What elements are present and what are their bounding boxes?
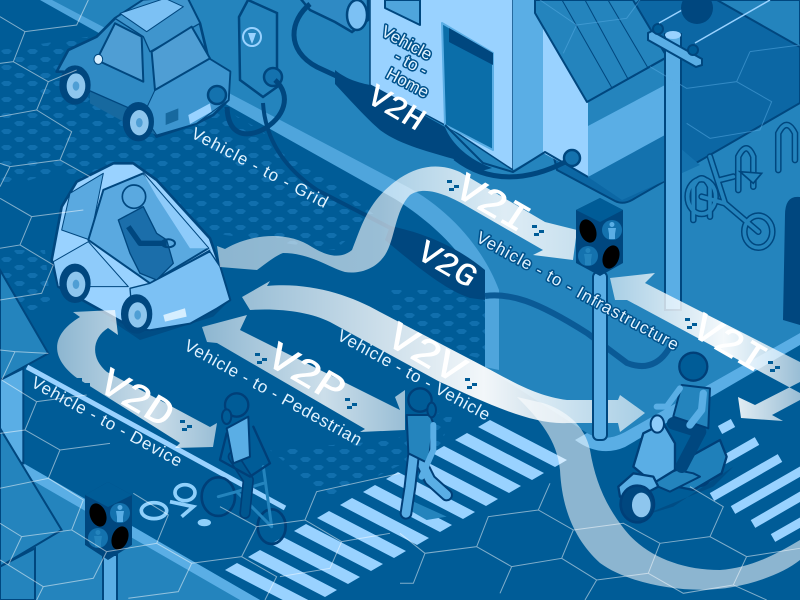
charging station <box>239 0 282 97</box>
second roof top right <box>717 0 800 47</box>
curb along right road <box>575 333 800 451</box>
front wheel <box>621 486 654 522</box>
door lintel shadow <box>449 28 493 65</box>
wing mirror <box>94 54 103 64</box>
rider leg <box>233 457 248 513</box>
car parked at charger top <box>300 0 368 32</box>
car cabin <box>88 173 208 283</box>
bike rack and parked bicycle <box>688 125 795 248</box>
scooter footboard <box>647 470 700 492</box>
label: vehicle to pedestrian: Vehicle - to - Pedestrian <box>181 336 365 449</box>
side wall shadow <box>588 60 665 126</box>
roof upper left building <box>0 270 48 380</box>
arm <box>422 425 433 477</box>
headlamp <box>651 415 664 433</box>
front leg <box>406 457 413 513</box>
rider far arm <box>657 388 680 407</box>
back wheel <box>202 477 235 516</box>
arrow: V2I right side <box>610 273 800 421</box>
sidewalk upper right <box>47 0 800 438</box>
scooter seat cowling <box>677 440 727 490</box>
car charge cable and plug <box>208 80 284 134</box>
cyclist <box>202 393 286 544</box>
label: vehicle to home on wall <box>378 22 435 102</box>
crosswalk main <box>225 420 567 600</box>
curb along upper road <box>40 0 499 370</box>
car upper side <box>62 173 103 240</box>
driver head <box>122 185 146 208</box>
steering wheel <box>162 239 175 247</box>
car rear <box>143 58 230 135</box>
crosswalk right <box>712 423 800 538</box>
label: vehicle to home on wall: Vehicle <box>378 22 435 64</box>
car roof surround <box>115 0 200 52</box>
windscreen highlight <box>143 173 208 248</box>
cable: vehicle to grid <box>263 103 673 366</box>
housing <box>85 482 132 560</box>
charger icon <box>243 28 261 46</box>
power wires <box>659 0 770 43</box>
house roof <box>535 0 667 102</box>
number plate <box>188 103 212 124</box>
stop signal <box>88 528 108 548</box>
housing top <box>85 482 132 507</box>
car shell <box>52 163 230 330</box>
rider leg <box>673 423 700 467</box>
pixel label V2I: V2I <box>445 167 537 244</box>
rider torso <box>673 385 710 428</box>
front wheel <box>258 509 286 544</box>
rider arm <box>690 393 703 425</box>
road behind house <box>540 0 800 203</box>
house <box>370 0 667 177</box>
back leg <box>418 457 447 495</box>
power pole <box>648 24 702 310</box>
ponytail <box>427 403 436 417</box>
pole <box>103 555 117 600</box>
housing top <box>576 198 623 222</box>
scooter with rider <box>618 353 733 522</box>
rear wheel <box>690 467 710 486</box>
pixel label V2H: V2H <box>359 79 432 139</box>
v2g cable blob <box>385 226 485 300</box>
car door side <box>53 242 128 287</box>
driver arm <box>128 227 167 243</box>
label: vehicle to grid: Vehicle - to - Grid <box>188 124 331 212</box>
car sill <box>90 92 157 135</box>
car shadow <box>110 300 230 340</box>
torso <box>407 415 433 463</box>
left buildings <box>0 270 62 600</box>
pixel label V2P: V2P <box>257 336 353 415</box>
lamp off <box>86 501 110 529</box>
side window <box>97 23 143 82</box>
walk signal <box>110 503 130 523</box>
rider ponytail <box>222 409 231 424</box>
house corner <box>543 0 600 177</box>
v2g ribbon lower body <box>517 397 800 590</box>
label: vehicle to home on wall: Home <box>383 64 432 102</box>
traffic light right <box>576 198 623 440</box>
left road lower sidewalk <box>0 450 260 600</box>
arrow: V2V <box>242 281 645 432</box>
leg shield <box>633 423 675 483</box>
wheel left <box>61 265 89 302</box>
rider top <box>227 417 250 463</box>
wall upper left building <box>0 368 23 463</box>
window <box>385 0 420 25</box>
door <box>442 23 493 150</box>
pixel label V2D: V2D <box>89 362 181 439</box>
lamp off <box>108 524 132 552</box>
charger socket <box>264 68 282 86</box>
car body <box>57 0 230 137</box>
headlamp <box>163 308 187 322</box>
rider head <box>225 393 248 417</box>
housing <box>576 198 623 276</box>
autonomous car with driver <box>52 163 230 340</box>
arrow: V2P <box>202 315 405 432</box>
house shadow on road <box>588 135 700 200</box>
house side wall <box>588 60 665 177</box>
house base outline <box>445 125 588 177</box>
helmet <box>679 353 707 381</box>
car roof <box>120 0 183 32</box>
wall lower left building <box>0 548 35 600</box>
pixel label V2V: V2V <box>377 316 473 395</box>
label: vehicle to vehicle: Vehicle - to - Vehicle <box>334 326 493 424</box>
v2h cable blob <box>335 70 492 172</box>
pixel label V2I right: V2I <box>682 307 774 384</box>
stop signal <box>578 246 598 266</box>
car wheel rear <box>61 67 89 103</box>
arrow: V2D <box>57 310 217 448</box>
lower windscreen <box>150 250 210 283</box>
red lamp off <box>576 217 600 245</box>
pixel dot clusters on arrows <box>77 180 780 431</box>
cable: vehicle to home <box>294 4 580 177</box>
car wheel front <box>124 103 153 140</box>
bicycle frame <box>218 467 272 527</box>
transformer <box>681 0 713 24</box>
bike lane line <box>27 367 285 508</box>
label: vehicle to device: Vehicle - to - Device <box>28 373 185 471</box>
plug socket <box>564 150 580 166</box>
pole <box>593 272 607 440</box>
driver torso <box>118 207 173 280</box>
house pillar <box>513 0 543 170</box>
wheel right <box>122 296 151 332</box>
roof lower left building <box>0 428 62 567</box>
pixel label V2G: V2G <box>409 235 484 296</box>
pedestrian <box>403 388 447 520</box>
walk signal <box>602 220 622 240</box>
cable toward traffic light <box>485 295 673 366</box>
pedestrian shadow <box>403 500 447 520</box>
rear window <box>152 27 210 90</box>
rider arms <box>220 427 270 477</box>
front leg outline <box>406 457 413 513</box>
scooter shadow <box>640 467 733 517</box>
car at charger <box>57 0 230 140</box>
back leg outline <box>418 457 447 495</box>
car hood <box>130 252 230 330</box>
traffic light left <box>85 482 132 600</box>
tail light <box>166 108 178 125</box>
cable to plug <box>455 158 565 177</box>
label: vehicle to infrastructure: Vehicle - to - Infrastructure <box>473 228 682 354</box>
standing person at right edge <box>783 197 800 325</box>
lamp off <box>599 243 623 271</box>
label: vehicle to home on wall: - to - <box>391 47 431 80</box>
house front wall <box>370 0 513 170</box>
arrow: V2I to car and traffic light <box>217 166 577 272</box>
bike lane symbol <box>141 485 211 526</box>
front fender <box>618 473 658 500</box>
head <box>408 388 432 412</box>
